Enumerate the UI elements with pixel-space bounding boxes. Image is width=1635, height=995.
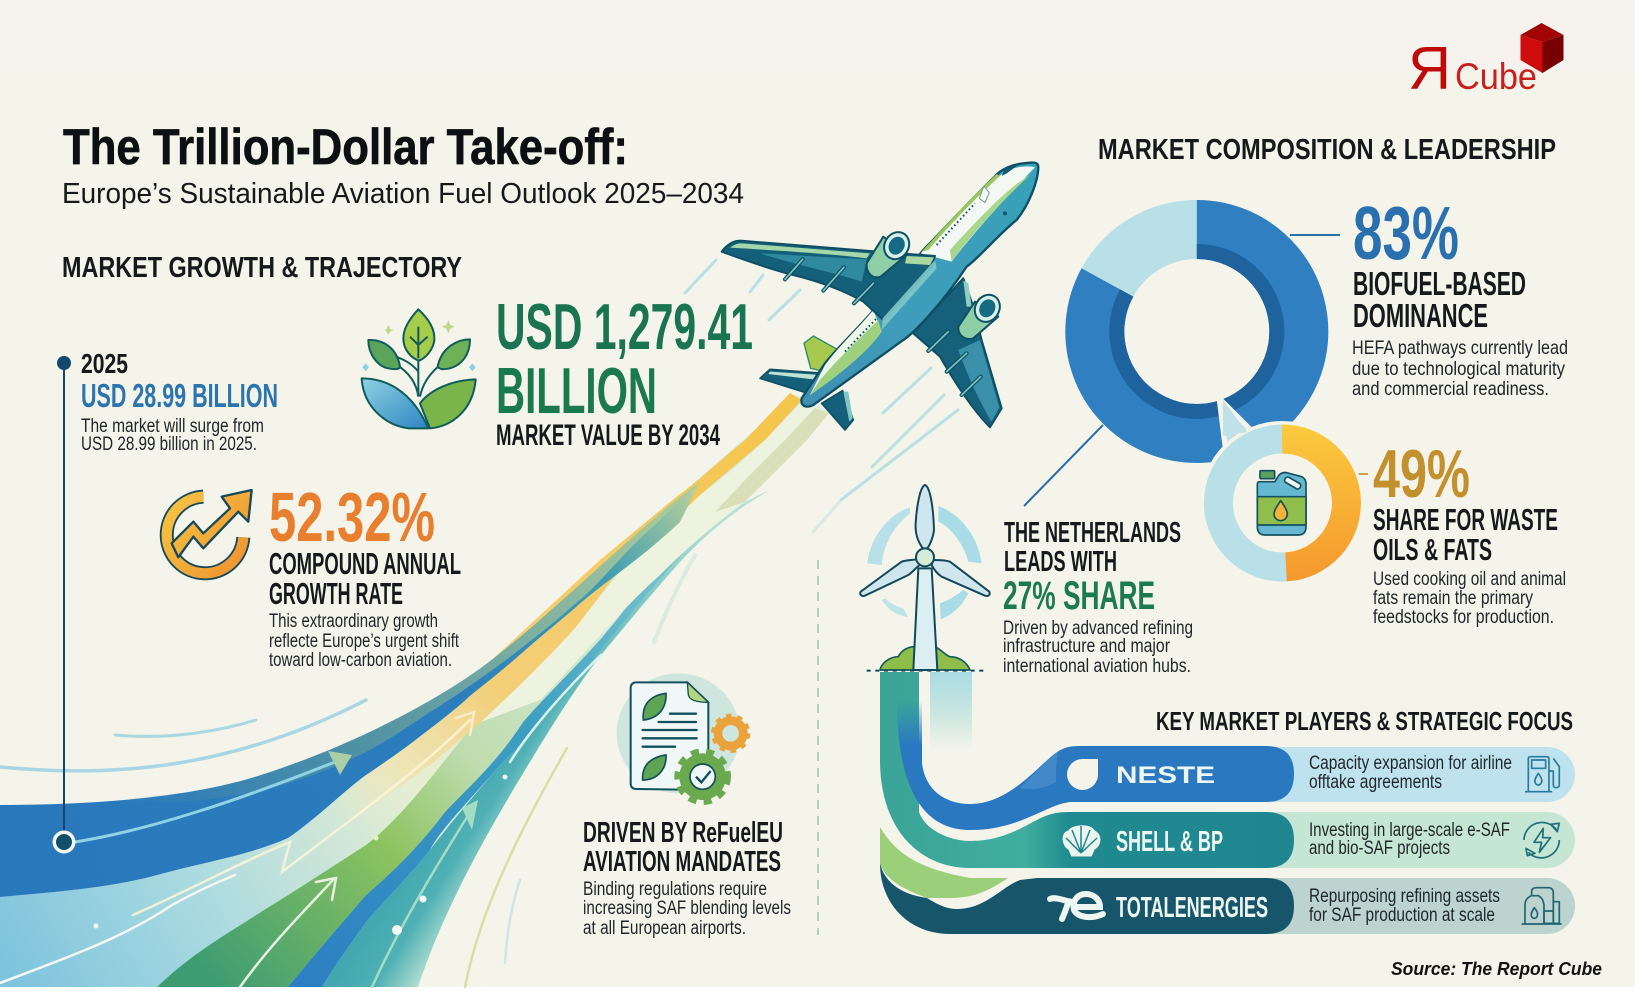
title: The Trillion-Dollar Take-off: <box>63 119 628 175</box>
stat: 83% biofuel: HEFA pathways currently lead <box>1352 338 1568 359</box>
stat: 52.32% CAGR: toward low-carbon aviation. <box>269 650 452 671</box>
driven by ReFuelEU: AVIATION MANDATES <box>583 846 781 878</box>
icon: renewable energy cycle <box>1524 822 1559 858</box>
icon: plant <box>362 309 476 428</box>
driven by ReFuelEU: Binding regulations require <box>583 879 767 900</box>
chart: biofuel donut <box>1095 230 1299 433</box>
row: TotalEnergies: Repurposing refining assets <box>1309 886 1500 907</box>
plane <box>722 162 1038 430</box>
stat: 2034 market value: MARKET VALUE BY 2034 <box>496 419 720 452</box>
stat: 49% waste oils: Used cooking oil and animal <box>1373 569 1566 590</box>
chart: waste oils donut <box>1200 398 1364 585</box>
source note: Source: The Report Cube <box>1391 959 1602 979</box>
driven by ReFuelEU: increasing SAF blending levels <box>583 898 791 919</box>
flow pipes into player rows <box>880 672 1294 934</box>
timeline <box>52 356 76 854</box>
row: Shell and BP: and bio-SAF projects <box>1309 838 1450 859</box>
2025 stat: USD 28.99 BILLION <box>81 377 278 414</box>
row: Shell and BP <box>1062 820 1510 859</box>
icon: refinery <box>1522 888 1562 924</box>
icon: fuel pump <box>1525 757 1559 792</box>
stat: 52.32% CAGR <box>269 478 461 671</box>
stat: 83% biofuel: 83% <box>1353 191 1459 275</box>
stat: 49% waste oils: 49% <box>1373 436 1470 512</box>
player pills <box>1230 747 1575 934</box>
stat: 83% biofuel: DOMINANCE <box>1353 297 1488 334</box>
driven by ReFuelEU: DRIVEN BY ReFuelEU <box>583 817 783 849</box>
stat: 2034 market value <box>496 290 753 452</box>
Netherlands text: international aviation hubs. <box>1003 656 1191 677</box>
stat: 83% biofuel: BIOFUEL-BASED <box>1353 265 1526 302</box>
flight trail streams <box>0 393 830 987</box>
stat: 52.32% CAGR: GROWTH RATE <box>269 576 403 611</box>
2025 stat: The market will surge from <box>81 416 264 437</box>
stat: 2034 market value: BILLION <box>496 354 657 427</box>
stat: 52.32% CAGR: reflecte Europe’s urgent shift <box>269 631 460 652</box>
icon: jerry can <box>1257 471 1306 535</box>
row: TotalEnergies <box>1050 886 1500 926</box>
2025 stat <box>81 348 278 455</box>
Netherlands text: Driven by advanced refining <box>1003 618 1193 639</box>
2025 stat: USD 28.99 billion in 2025. <box>81 434 257 455</box>
driven by ReFuelEU <box>583 817 791 939</box>
row: Shell and BP: Investing in large-scale e-SAF <box>1309 820 1510 841</box>
heading: market growth: MARKET GROWTH & TRAJECTORY <box>62 252 462 284</box>
row: TotalEnergies: TOTALENERGIES <box>1116 892 1268 924</box>
stat: 49% waste oils: fats remain the primary <box>1373 588 1533 609</box>
logo <box>1408 23 1564 102</box>
stat: 52.32% CAGR: COMPOUND ANNUAL <box>269 546 461 581</box>
title <box>62 119 744 210</box>
Netherlands text: 27% SHARE <box>1003 574 1155 618</box>
row: Neste: Capacity expansion for airline <box>1309 753 1512 774</box>
Netherlands text <box>1003 517 1193 677</box>
trail arrows and accent lines <box>0 555 695 987</box>
stat: 83% biofuel: and commercial readiness. <box>1352 379 1549 400</box>
row: TotalEnergies: for SAF production at scale <box>1309 905 1495 926</box>
stat: 83% biofuel <box>1352 191 1568 400</box>
stat: 52.32% CAGR: This extraordinary growth <box>269 611 438 632</box>
stat: 49% waste oils <box>1373 436 1566 628</box>
icon: regulation document and gears <box>617 673 748 802</box>
row: Neste: offtake agreements <box>1309 772 1442 793</box>
row: Shell and BP: SHELL & BP <box>1116 826 1223 858</box>
icon: growth arrow <box>167 490 252 573</box>
Netherlands text: THE NETHERLANDS <box>1004 517 1181 549</box>
stat: 52.32% CAGR: 52.32% <box>269 478 435 556</box>
stat: 83% biofuel: due to technological maturity <box>1352 359 1565 380</box>
logo: Cube <box>1455 56 1537 97</box>
driven by ReFuelEU: at all European airports. <box>583 918 746 939</box>
Netherlands text: infrastructure and major <box>1003 636 1171 657</box>
connector lines <box>1024 235 1368 506</box>
row: Neste: NESTE <box>1116 762 1215 789</box>
dashed divider <box>817 560 819 935</box>
stat: 49% waste oils: OILS & FATS <box>1373 532 1492 567</box>
stat: 49% waste oils: feedstocks for production. <box>1373 607 1554 628</box>
stat: 2034 market value: USD 1,279.41 <box>496 290 753 363</box>
Netherlands text: LEADS WITH <box>1004 546 1117 578</box>
logo: Я <box>1408 35 1451 102</box>
plane speed lines <box>685 260 958 532</box>
key players pale strip <box>930 672 972 750</box>
icon: wind turbine <box>860 485 990 671</box>
2025 stat: 2025 <box>81 348 128 379</box>
title: Europe’s Sustainable Aviation Fuel Outlook 2025–2034 <box>62 178 744 210</box>
row: Neste <box>1067 753 1512 793</box>
